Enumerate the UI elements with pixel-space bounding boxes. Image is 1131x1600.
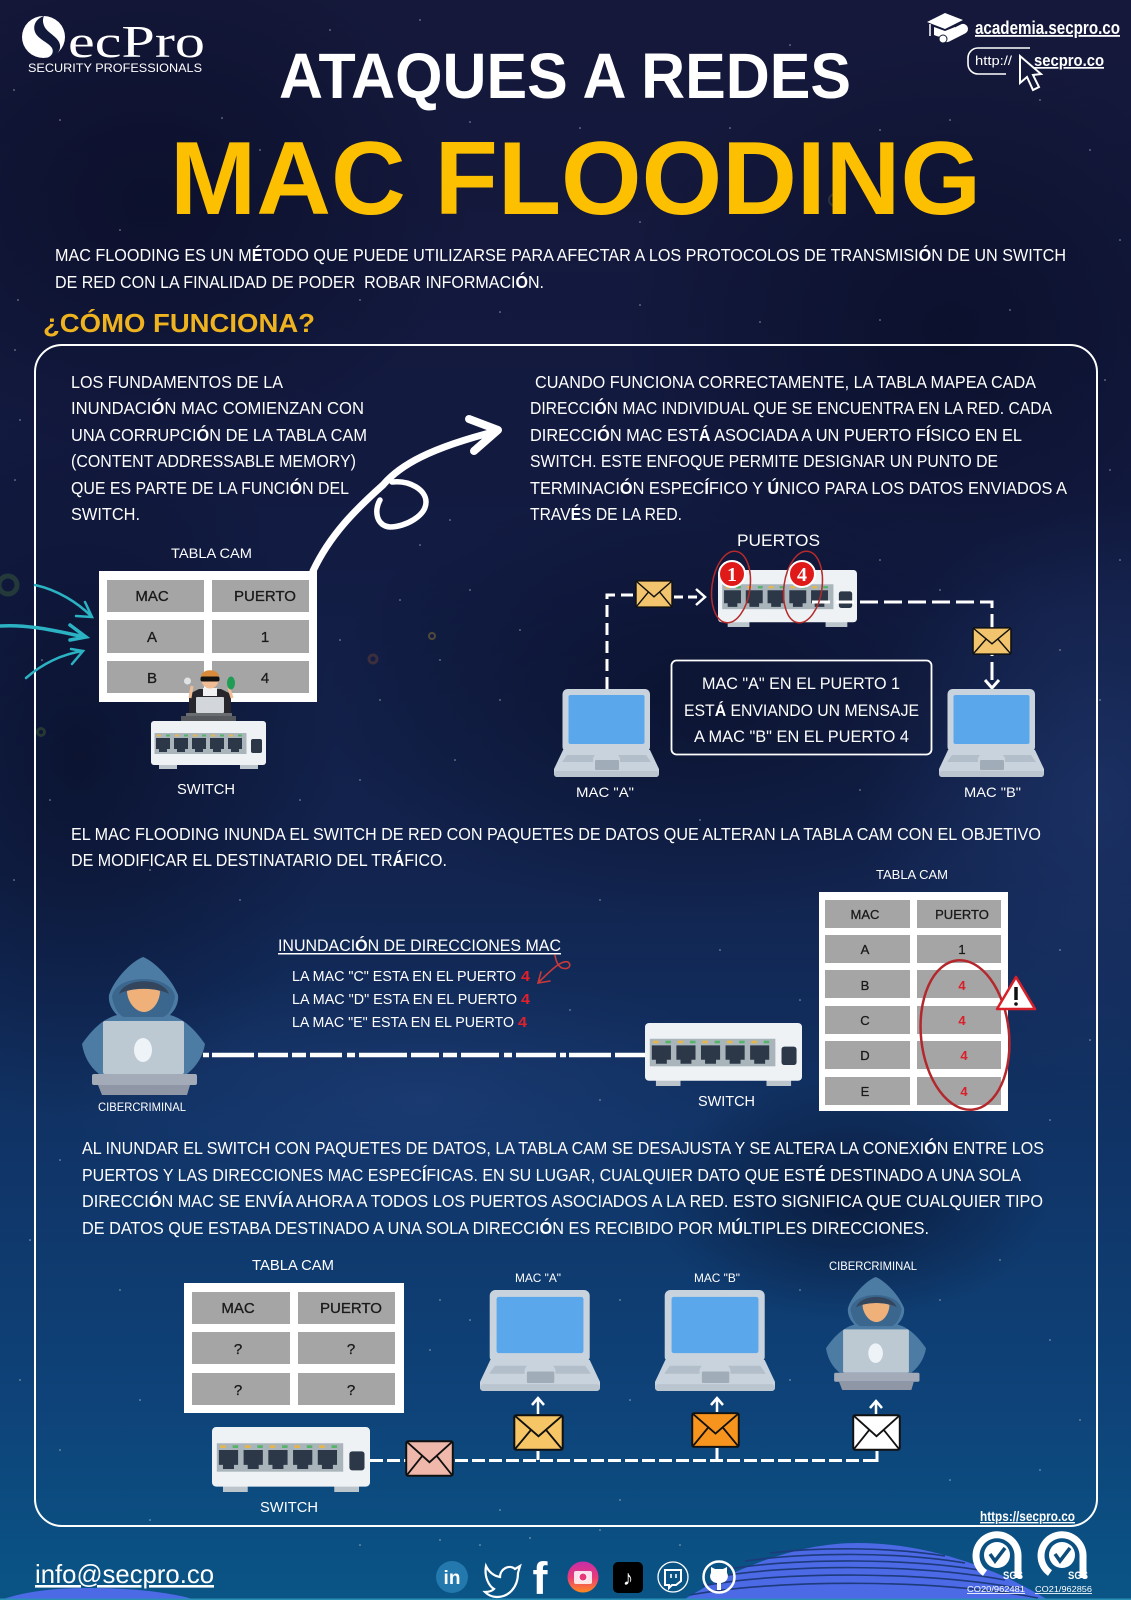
icon: warning [997, 977, 1035, 1009]
intro text [55, 244, 1066, 292]
cell text: A [861, 942, 870, 957]
envelope: pink [406, 1441, 453, 1476]
cell text: E [861, 1084, 870, 1099]
label: switch: SWITCH [260, 1500, 318, 1516]
text block: tabla mapea: TRAVÉS DE LA RED. [530, 503, 682, 524]
label: TABLA CAM [876, 867, 948, 882]
cell text: PUERTO [320, 1300, 382, 1317]
title: MAC FLOODING: MAC FLOODING [170, 121, 981, 237]
icon: linkedin [436, 1561, 468, 1593]
table body [99, 571, 317, 702]
callout: message: MAC "A" EN EL PUERTO 1 [702, 674, 900, 693]
text block: fundamentos: SWITCH. [71, 504, 140, 524]
label: mac A: MAC "A" [576, 784, 634, 800]
text block: fundamentos: QUE ES PARTE DE LA FUNCIÓN DEL [71, 477, 349, 498]
cell text: ? [234, 1341, 242, 1358]
cell text: D [860, 1048, 870, 1063]
text block: tabla mapea: DIRECCIÓN MAC ESTÁ ASOCIADA A UN PUERTO FÍSICO EN EL [530, 424, 1022, 445]
laptop: mac A [480, 1290, 600, 1391]
red circle [913, 956, 1017, 1114]
cell text: MAC [135, 588, 169, 605]
text block: resultado: AL INUNDAR EL SWITCH CON PAQUETES DE DATOS, LA TABLA CAM SE DESAJUSTA Y SE ALTERA LA CONEXIÓN ENTRE LOS [82, 1137, 1044, 1158]
icon: cybercriminal [82, 957, 205, 1095]
intro text: MAC FLOODING ES UN MÉTODO QUE PUEDE UTILIZARSE PARA AFECTAR A LOS PROTOCOLOS DE TRANSMISIÓN DE UN SWITCH [55, 244, 1066, 265]
text block: inundacion: EL MAC FLOODING INUNDA EL SWITCH DE RED CON PAQUETES DE DATOS QUE ALTERAN LA TABLA CAM CON EL OBJETIVO [71, 824, 1041, 844]
cell text [135, 588, 296, 687]
cell text: 4 [261, 670, 269, 687]
icon: graduation cap [927, 13, 970, 44]
cell text: B [147, 670, 157, 687]
logo: SecPro [22, 16, 205, 75]
cell text: ? [347, 1382, 355, 1399]
port marker 4: 4 [797, 564, 807, 586]
label: mac B: MAC "B" [964, 784, 1021, 800]
icon: switch 3 [645, 1023, 802, 1086]
label: switch: SWITCH [698, 1094, 755, 1110]
port marker 4 [779, 549, 827, 625]
list: mac flood entries: 4 [518, 1015, 527, 1031]
icon: cybercriminal [826, 1277, 926, 1390]
list: mac flood entries: LA MAC "D" ESTA EN EL PUERTO [292, 992, 517, 1008]
label: switch: SWITCH [177, 782, 235, 798]
envelope 2 [973, 628, 1011, 654]
text block: tabla mapea: SWITCH. ESTE ENFOQUE PERMITE DESIGNAR UN PUNTO DE [530, 451, 998, 471]
icon: instagram [568, 1562, 598, 1592]
social icons [436, 1553, 734, 1600]
icon: tiktok: ♪ [623, 1567, 633, 1590]
arrow: hand-drawn white loop [313, 419, 498, 571]
icon: twitter [485, 1566, 520, 1597]
text block: resultado [82, 1137, 1044, 1238]
cell text: 1 [261, 629, 269, 646]
certification badge 2 [1035, 1535, 1092, 1594]
cell text: B [861, 978, 869, 993]
text block: fundamentos: (CONTENT ADDRESSABLE MEMORY) [71, 451, 356, 471]
table: CAM 1 [99, 545, 317, 702]
list: mac flood entries: LA MAC "E" ESTA EN EL PUERTO [292, 1015, 514, 1031]
cell text: ? [347, 1341, 355, 1358]
dashed line: flood [203, 1053, 645, 1057]
text block: tabla mapea [530, 372, 1067, 524]
list: mac flood entries: 4 [521, 969, 530, 985]
link: secpro: secpro.co [1034, 51, 1104, 70]
laptop: mac B [655, 1290, 775, 1391]
text block: fundamentos [71, 372, 367, 524]
label: mac A: MAC "A" [515, 1271, 561, 1285]
text block: resultado: DIRECCIÓN MAC SE ENVÍA AHORA A TODOS LOS PUERTOS ASOCIADOS A LA RED. ESTO SIGNIFICA QUE CUALQUIER TIPO [82, 1190, 1043, 1211]
icon: cursor [1020, 56, 1041, 90]
label: TABLA CAM [252, 1258, 334, 1274]
cell text: PUERTO [935, 907, 989, 922]
cell text [851, 907, 989, 1099]
table: CAM 3 [184, 1258, 404, 1413]
heading: INUNDACIÓN DE DIRECCIONES MAC [278, 936, 561, 955]
icon: twitch [658, 1562, 688, 1592]
text: http: http:// [975, 54, 1013, 68]
wordmark: ecPro [68, 17, 205, 67]
cell text: 4 [960, 1048, 968, 1063]
cell text: C [860, 1013, 870, 1028]
callout: message: A MAC "B" EN EL PUERTO 4 [694, 727, 909, 746]
certification badge 1: CO20/962481 [967, 1584, 1025, 1594]
table body [819, 892, 1008, 1111]
dashed connection: switch to mac B [812, 602, 999, 688]
cell text [221, 1300, 382, 1399]
arrows: teal pointing to table [0, 585, 92, 678]
certification badge 1: SGS [1003, 1570, 1023, 1582]
link: https secpro: https://secpro.co [980, 1508, 1075, 1524]
certification badge 2: CO21/962856 [1035, 1584, 1092, 1594]
icon: switch 4 [212, 1427, 370, 1492]
text block: fundamentos: UNA CORRUPCIÓN DE LA TABLA CAM [71, 424, 367, 445]
envelope: white [853, 1415, 900, 1450]
decorative waves [0, 1543, 1131, 1600]
icon: switch 1 [151, 721, 266, 769]
list: mac flood entries [278, 936, 561, 1031]
label: mac B: MAC "B" [694, 1271, 740, 1285]
top right links [927, 13, 1120, 90]
text block: inundacion [71, 824, 1041, 870]
link: email: info@secpro.co [35, 1559, 214, 1589]
icon: linkedin: in [444, 1568, 460, 1589]
text block: tabla mapea: TERMINACIÓN ESPECÍFICO Y ÚNICO PARA LOS DATOS ENVIADOS A [530, 477, 1067, 498]
label: cibercriminal: CIBERCRIMINAL [98, 1102, 187, 1114]
port marker 1 [707, 549, 755, 625]
envelope 1 [636, 581, 672, 607]
cell text: MAC [221, 1300, 255, 1317]
envelope: yellow [514, 1415, 563, 1450]
certification badge 2: SGS [1068, 1570, 1088, 1582]
list: mac flood entries: 4 [521, 992, 530, 1008]
icon: tiktok [613, 1562, 643, 1593]
cell text: PUERTO [234, 588, 296, 605]
text block: fundamentos: INUNDACIÓN MAC COMIENZAN CON [71, 397, 364, 418]
dashed line: broadcast [370, 1398, 882, 1462]
dashed connection: mac A to switch [607, 589, 705, 689]
laptop: mac B [939, 689, 1044, 777]
icon: github [704, 1562, 734, 1592]
heading: como funciona: ¿CÓMO FUNCIONA? [43, 308, 315, 338]
url box [968, 48, 1030, 74]
certification badge 1 [967, 1535, 1025, 1594]
label: cibercriminal: CIBERCRIMINAL [829, 1261, 918, 1273]
arrow: red scribble [538, 955, 570, 983]
callout: message [672, 660, 932, 754]
text block: inundacion: DE MODIFICAR EL DESTINATARIO DEL TRÁFICO. [71, 849, 447, 870]
text block: tabla mapea: DIRECCIÓN MAC INDIVIDUAL QUE SE ENCUENTRA EN LA RED. CADA [530, 397, 1052, 418]
callout: message: ESTÁ ENVIANDO UN MENSAJE [684, 701, 919, 720]
text block: resultado: PUERTOS Y LAS DIRECCIONES MAC ESPECÍFICAS. EN SU LUGAR, CUALQUIER DATO QUE ESTÉ DESTINADO A UNA SOLA [82, 1164, 1021, 1185]
cell text: 4 [958, 1013, 966, 1028]
laptop: mac A [554, 689, 659, 777]
label: TABLA CAM [171, 545, 252, 561]
label: puertos: PUERTOS [737, 531, 820, 550]
icon: thief with laptop [181, 670, 236, 721]
panel: main frame [35, 345, 1097, 1526]
entries: LA MAC "C" ESTA EN EL PUERTO [292, 969, 516, 985]
table: CAM 2 [819, 867, 1035, 1114]
text block: tabla mapea: CUANDO FUNCIONA CORRECTAMENTE, LA TABLA MAPEA CADA [535, 372, 1036, 392]
intro text: DE RED CON LA FINALIDAD DE PODER ROBAR INFORMACIÓN. [55, 271, 544, 292]
cell text: 1 [958, 942, 966, 957]
text block: resultado: DE DATOS QUE ESTABA DESTINADO A UNA SOLA DIRECCIÓN ES RECIBIDO POR MÚLTIPLES DIRECCIONES. [82, 1217, 929, 1238]
envelope: orange [692, 1413, 739, 1447]
cell text: ? [234, 1382, 242, 1399]
table body [184, 1283, 404, 1413]
icon: switch 2 [718, 570, 857, 627]
port marker 1: 1 [727, 564, 737, 586]
icon: S swirl [22, 16, 65, 58]
cell text: A [147, 629, 157, 646]
tagline: SECURITY PROFESSIONALS [28, 61, 202, 75]
title: ATAQUES A REDES [279, 40, 851, 112]
cell text: MAC [851, 907, 879, 922]
cell text: 4 [958, 978, 966, 993]
text block: fundamentos: LOS FUNDAMENTOS DE LA [71, 372, 283, 392]
cell text: 4 [960, 1084, 968, 1099]
